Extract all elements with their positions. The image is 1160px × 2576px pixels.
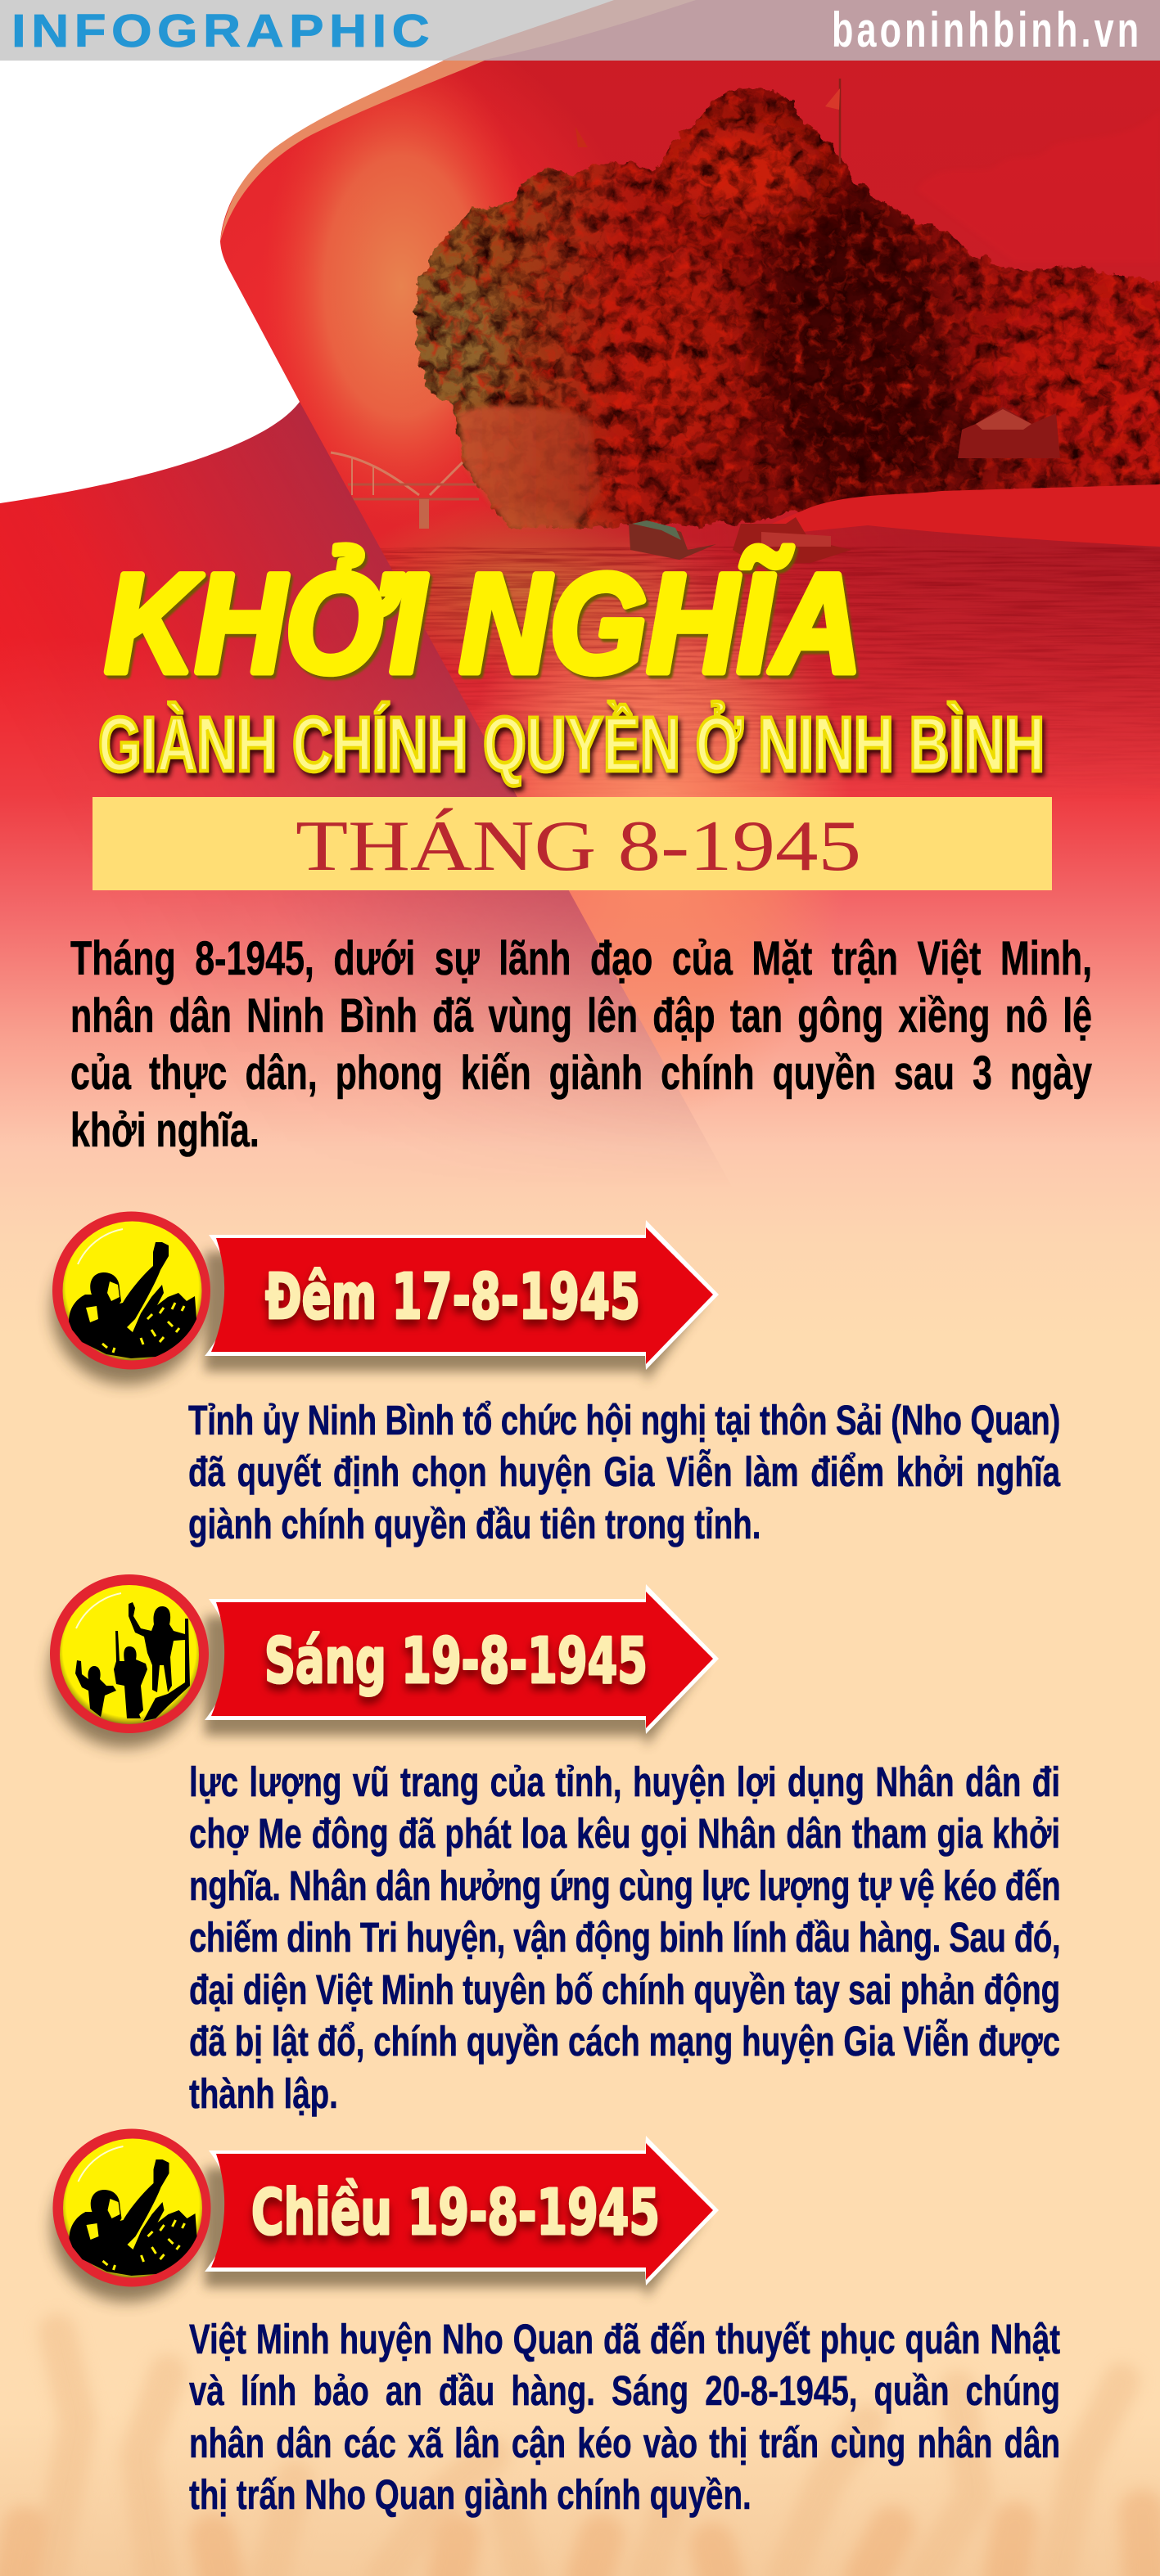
- distant tree line: [917, 110, 1160, 262]
- body text: Tỉnh ủy Ninh Bình tổ chức hội nghị tại thôn Sải (Nho Quan): [188, 1397, 1060, 1443]
- water glow near boats: [344, 499, 720, 679]
- arrow shadow: [205, 1252, 704, 1383]
- intro paragraph: khởi nghĩa.: [70, 1104, 260, 1157]
- water texture: [380, 547, 1160, 768]
- panel: Đêm 17-8-1945: [42, 1211, 1061, 1547]
- intro paragraph: Tháng 8-1945, dưới sự lãnh đạo của Mặt trận Việt Minh,: [70, 932, 1092, 985]
- crowd watermark: [16, 2332, 1146, 2576]
- sand bank: [737, 484, 1160, 547]
- body text: thành lập.: [189, 2070, 338, 2117]
- body text: đã bị lật đổ, chính quyền cách mạng huyện Gia Viễn được: [189, 2018, 1060, 2065]
- bright red glow behind wave: [0, 61, 655, 658]
- arrow banner: [205, 1584, 719, 1734]
- body text: [188, 2316, 1060, 2518]
- body text: chiếm dinh Tri huyện, vận động binh lính đầu hàng. Sau đó,: [189, 1914, 1060, 1961]
- body text: [189, 1759, 1060, 2117]
- intro paragraph: nhân dân Ninh Bình đã vùng lên đập tan gông xiềng nô lệ: [70, 989, 1092, 1043]
- large light and shade masses: [426, 123, 1160, 499]
- tan edge band of wave: [220, 61, 485, 241]
- intro paragraph: [70, 932, 1092, 1157]
- water glow: [426, 524, 917, 1146]
- icon: crowd badge: [52, 2129, 211, 2286]
- title block: [93, 542, 1052, 890]
- date banner: [93, 797, 1052, 890]
- heading text: Chiều 19-8-1945: [251, 2177, 660, 2249]
- body text: nghĩa. Nhân dân hưởng ứng cùng lực lượng tự vệ kéo đến: [189, 1862, 1060, 1909]
- flag pole and flags: [839, 79, 841, 164]
- header label: baoninhbinh.vn: baoninhbinh.vn: [832, 3, 1139, 58]
- rock face: [458, 406, 602, 528]
- arrow shadow: [205, 1616, 704, 1747]
- body text: thị trấn Nho Quan giành chính quyền.: [189, 2471, 752, 2518]
- boats: [629, 517, 851, 565]
- intro paragraph: của thực dân, phong kiến giành chính quyền sau 3 ngày: [70, 1047, 1092, 1100]
- header label: INFOGRAPHIC: INFOGRAPHIC: [11, 4, 430, 56]
- body text: giành chính quyền đầu tiên trong tỉnh.: [188, 1501, 761, 1547]
- arrow banner: [205, 1220, 719, 1370]
- hill photo: [414, 79, 1160, 528]
- body text: đại diện Việt Minh tuyên bố chính quyền tay sai phản động: [189, 1966, 1060, 2013]
- temple: [958, 407, 1060, 458]
- badge shadow: [49, 1597, 200, 1748]
- body text: nhân dân các xã lân cận kéo vào thị trấn cùng nhân dân: [189, 2420, 1060, 2466]
- body text: đã quyết định chọn huyện Gia Viễn làm điểm khởi nghĩa: [188, 1448, 1060, 1495]
- main title: KHỞI NGHĨA: KHỞI NGHĨA: [105, 545, 862, 702]
- body text: [188, 1397, 1061, 1547]
- crowd watermark base: [0, 2414, 1160, 2576]
- date banner: THÁNG 8-1945: [296, 807, 861, 886]
- panel: Chiều 19-8-1945: [42, 2129, 1060, 2518]
- heading graphic: badge and arrow: [42, 2129, 719, 2312]
- heading text: Sáng 19-8-1945: [264, 1625, 648, 1698]
- heading graphic: badge and arrow: [39, 1574, 719, 1758]
- arrow shadow: [205, 2168, 704, 2299]
- body text: chợ Me đông đã phát loa kêu gọi Nhân dân tham gia khởi: [189, 1810, 1060, 1857]
- badge shadow: [52, 1234, 202, 1385]
- dark wedge base: [0, 402, 732, 1187]
- white wave shape: [0, 49, 444, 503]
- top band grey: [0, 0, 614, 61]
- badge shadow: [52, 2151, 202, 2302]
- heading graphic: badge and arrow: [42, 1211, 719, 1394]
- body text: và lính bảo an đầu hàng. Sáng 20-8-1945, quần chúng: [189, 2367, 1060, 2414]
- icon: fighters badge: [50, 1574, 209, 1733]
- panel: Sáng 19-8-1945: [39, 1574, 1060, 2117]
- dark wedge shade: [49, 402, 697, 1126]
- icon: crowd badge: [52, 1211, 210, 1370]
- bridge: [331, 453, 479, 529]
- top band tan strip: [0, 0, 696, 61]
- arrow banner: [205, 2136, 719, 2286]
- orange glow left of hill: [229, 33, 557, 540]
- body text: lực lượng vũ trang của tỉnh, huyện lợi dụng Nhân dân đi: [189, 1759, 1060, 1805]
- water shade: [728, 524, 1160, 759]
- body text: Việt Minh huyện Nho Quan đã đến thuyết phục quân Nhật: [189, 2316, 1060, 2362]
- heading text: Đêm 17-8-1945: [265, 1261, 640, 1334]
- top band right tint: [0, 0, 1160, 61]
